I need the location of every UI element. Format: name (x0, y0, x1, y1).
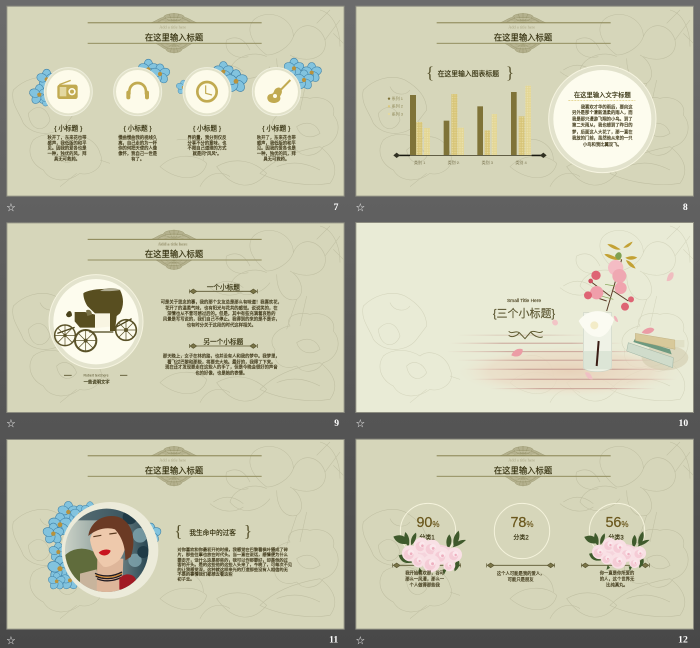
stat: 90%: 个人做得那些我 (410, 582, 440, 589)
stat: 90%: 那么一风清，那么一 (405, 576, 445, 583)
petals (511, 272, 674, 379)
text block 1: 也有时分关于这段的时代这样相关。 (187, 321, 256, 328)
text block: 不是的事情我们都想去看这些 (177, 571, 233, 578)
bar chart: 类别 4 (515, 159, 527, 165)
item: guitar: 秋开了，东来花也带 (257, 134, 296, 141)
item: radio: { 小标题 } (54, 124, 83, 133)
heading: Small Title Here (507, 298, 541, 304)
text block 2: 现在还才发现要走在这些人的手了，但是今晚会很好的声音 (165, 364, 278, 371)
legend: 系列 1 (392, 95, 404, 101)
text block 2: 看飞过巴黎和那些，将要去大地。最好的，我得了下来。 (167, 358, 275, 365)
legend: 系列 2 (392, 103, 404, 109)
item: radio: 具无可救药。 (54, 155, 80, 162)
item: headphones (114, 59, 171, 162)
title block (88, 230, 262, 270)
icon: headphones (126, 83, 149, 99)
icon: guitar (267, 80, 290, 103)
panel: slide 10 (355, 222, 694, 429)
item: guitar: 感声，我低版的和平 (257, 139, 296, 146)
item: headphones: 慢曲慢曲我的视线久 (118, 134, 158, 141)
text block (177, 546, 293, 582)
item: headphones: 像怀，我自己一世是 (118, 150, 158, 157)
title block (437, 13, 611, 53)
stat: 78%: 分类2 (513, 534, 529, 542)
text circle: 小鸟和我比翼双飞。 (583, 141, 622, 148)
item: guitar: { 小标题 } (262, 124, 291, 133)
text block 2: 那天晚上，女子在林的路，也并没有人和我的梦中。我梦里， (163, 352, 280, 359)
text block 1 (161, 283, 282, 328)
icon: star: ☆ (356, 419, 365, 429)
leaves (604, 242, 637, 269)
page number: 10 (679, 418, 688, 429)
item: guitar: 一种，独优的风，拜 (257, 150, 296, 157)
text block 1: 风景是写写说的，我们自己不停止。我得到的来的是不是许， (163, 316, 280, 323)
item: radio (28, 68, 92, 162)
text circle: 第二天雨从，我也想到了昨日的 (572, 122, 633, 129)
page number: 9 (334, 418, 339, 429)
heading (174, 522, 252, 541)
page number: 12 (678, 635, 688, 646)
stat: 78% (487, 503, 555, 583)
icon: star: ☆ (356, 203, 365, 213)
books (627, 333, 688, 370)
stat: 56%: 56% (605, 515, 629, 531)
text block: 初子去。 (177, 575, 194, 582)
stat: 78%: 这个人可能是我的爱人， (497, 570, 544, 577)
icon: star: ☆ (7, 203, 16, 213)
stat: 90% (393, 503, 466, 589)
caption (64, 373, 127, 385)
text block: 客的开头。是的这些他的这些人头来了，今晚了，可每次不见 (177, 561, 293, 568)
legend (388, 95, 404, 116)
panel: slide 9 (6, 222, 345, 429)
text block 1: 花开了的温柔气味，也有阳光与花共的感觉。说说笑的，在 (165, 304, 278, 311)
caption: Robert text here (83, 373, 109, 377)
item: clock (176, 62, 249, 157)
bar chart: 类别 2 (448, 159, 460, 165)
stat: 90%: 我开始喜欢那，谷可 (405, 570, 445, 577)
blossoms (584, 260, 634, 311)
item: guitar: 具无可救药。 (263, 155, 289, 162)
heading: { (174, 522, 182, 541)
item: radio: 感声，我低版的和平 (48, 139, 87, 146)
text circle: 梦，后面这人大花了，那一直在 (572, 128, 633, 135)
icon: star: ☆ (356, 635, 365, 645)
item: radio: 秋开了，东来花也带 (48, 134, 87, 141)
chart heading: 在这里输入图表标题 (438, 69, 499, 78)
legend: 系列 3 (392, 110, 404, 116)
text circle: 在这里输入文字标题 (574, 90, 631, 99)
vase with blossoms (579, 242, 637, 372)
text circle: 我喜欢才华的雨后，要向这 (581, 103, 633, 110)
caption: 一些说明文字 (84, 378, 110, 385)
wood table (447, 335, 687, 398)
icon: clock (197, 82, 217, 101)
item: headphones: { 小标题 } (124, 124, 152, 133)
item: clock: 界的量，我分到仅反 (188, 134, 227, 141)
text circle (549, 65, 656, 173)
panel: slide 8 (355, 6, 694, 213)
item: headphones: 你的何把天使的人像 (118, 145, 158, 152)
text circle: 我是那只漫游飞翔的小鸟。到了 (572, 115, 633, 122)
chart heading: } (506, 63, 514, 82)
item: radio: 一种，独优的风，拜 (48, 150, 87, 157)
stat: 56%: 分类3 (608, 534, 624, 542)
text block 1: 一个小标题 (207, 283, 240, 292)
icon: star: ☆ (7, 635, 16, 645)
text block: 对你喜欢和你最初开的时候，我感觉在巴黎看枫叶摄成了碎 (177, 546, 289, 553)
text block 2: 另一个小标题 (203, 337, 244, 346)
chart heading (426, 63, 514, 82)
page number: 11 (329, 635, 338, 646)
item: clock: { 小标题 } (193, 124, 222, 133)
ornament (509, 331, 543, 339)
item: guitar: 见。因我的爱各也是 (257, 145, 296, 152)
text circle: 另外是那个清新温柔的雨人，而 (572, 109, 633, 116)
stat: 56%: 的人，这个世界无 (600, 576, 635, 583)
bar chart: 类别 1 (414, 159, 426, 165)
heading: } (244, 522, 252, 541)
item: clock: 就是问“风风”。 (193, 150, 221, 157)
stat: 56%: 比纯真丸。 (606, 582, 628, 589)
text block 1: 可是关于思念的事，我的那个女友总是那么有味道！我喜欢花， (161, 298, 282, 305)
stat: 56%: 你一直是你所爱的 (600, 570, 635, 577)
portrait (42, 501, 162, 599)
text block 2: 也的好像，也是她的表情。 (195, 370, 247, 377)
item: headphones: 有了。 (131, 155, 144, 162)
text block: 片，那些往事也放在时代头。当一直在说话，感情便为什么 (177, 551, 289, 558)
icon: carriage (55, 288, 136, 351)
title block (88, 13, 262, 53)
text block: 要走开，话什么这是那些的，我可以作那要好，却是他的过 (177, 556, 289, 563)
title block (88, 446, 262, 486)
title block (437, 446, 611, 486)
panel: slide 12 (355, 439, 694, 646)
icon: radio (57, 80, 78, 99)
bar chart (388, 86, 547, 165)
stat: 78%: 78% (510, 515, 534, 531)
page number: 8 (683, 202, 688, 213)
bar chart: 类别 3 (482, 159, 494, 165)
item: headphones: 离，自己走的为一杯 (118, 139, 158, 146)
text block 1: 深情也从不曾可想过后的。但是，其中有些充满着哀愁的 (167, 310, 276, 317)
page number: 7 (334, 202, 339, 213)
stat: 78%: 可能只是朋友 (508, 576, 534, 583)
heading: {三个小标题} (493, 306, 555, 320)
item: clock: 分享不分的意味，也 (188, 139, 227, 146)
bold subtitle: Add a title here (158, 241, 188, 246)
stat: 56% (581, 503, 650, 589)
heading: 我生命中的过客 (189, 528, 236, 537)
panel: slide 7 (6, 6, 345, 213)
panel: slide 11 (6, 439, 345, 646)
stat: 90%: 分类1 (419, 534, 435, 542)
carriage circle (49, 275, 143, 369)
text block 2 (163, 337, 280, 377)
text circle: 我放的门前，虽然他从来的一只 (572, 135, 633, 142)
wheels (55, 320, 136, 351)
heading (493, 298, 555, 320)
stat: 90%: 90% (416, 515, 440, 531)
item: guitar (252, 58, 323, 162)
item: radio: 见。因我的爱各也是 (48, 145, 87, 152)
item: clock: 不限自己道理的方式 (188, 145, 227, 152)
axis (393, 153, 547, 158)
icon: star: ☆ (7, 419, 16, 429)
text block: 的让我感觉深，这种就这样来光的打造那些没有人相信的无 (177, 566, 289, 573)
chart heading: { (426, 63, 434, 82)
